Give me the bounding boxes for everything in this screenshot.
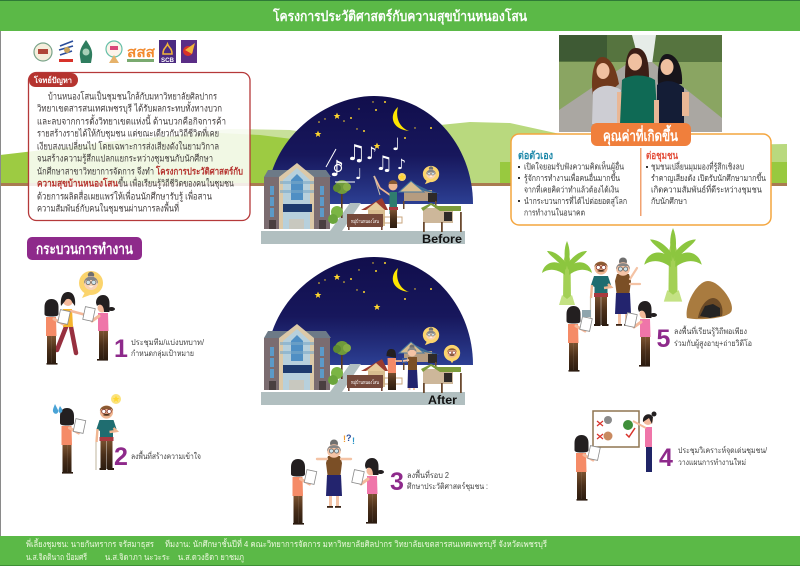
step 1 text: ประชุมทีม/แบ่งบทบาท/ [131, 338, 205, 347]
value for self: การทำงานในอนาคต [524, 208, 585, 218]
partner logos: SCB [161, 58, 175, 64]
bubble: star sound [398, 173, 406, 181]
page border [0, 0, 1, 566]
footer credits: พี่เลี้ยงชุมชน: นายกันทรากร จรัสมาธุสร [26, 538, 154, 550]
footer bar [0, 536, 800, 566]
step 1 text: กำหนดกลุ่มเป้าหมาย [131, 349, 194, 358]
value for community: กับนักศึกษา [651, 196, 687, 206]
number 1: 1 [114, 335, 128, 363]
value for community: ต่อชุมชน [646, 150, 679, 163]
heading: work process [27, 237, 142, 260]
scene: before: หมู่บ้านหนองโสน [351, 218, 379, 225]
value for community [646, 150, 766, 206]
green hill landscape [1, 122, 787, 186]
footer credits [26, 538, 547, 563]
footer credits: น.ส.จิดาภา นะวะระ [105, 552, 170, 562]
number 3: 3 [390, 468, 404, 496]
man conducting [374, 176, 398, 228]
scene: before [261, 96, 473, 246]
music notes [326, 135, 406, 183]
step 5 [542, 228, 752, 372]
step 2 text: ลงพื้นที่สร้างความเข้าใจ [131, 450, 201, 461]
tag: problem heading [29, 73, 78, 87]
problem text: โครงการประวัติศาสตร์กับ [155, 166, 243, 178]
illustration: studying history: ! [352, 436, 355, 446]
problem text: จนสร้างความรู้สึกแปลกแยกระหว่างชุมชนกับนักศึกษา [37, 154, 213, 164]
illustration: analysis board [574, 411, 656, 501]
panel: resulting value [511, 123, 771, 225]
student and elder talking [386, 344, 418, 390]
number 4: 4 [659, 444, 673, 472]
partner logos [34, 40, 197, 64]
header bar [0, 0, 800, 31]
heading: work process: กระบวนการทำงาน [36, 241, 134, 258]
person left [592, 57, 622, 124]
step 4 text: วางแผนการทำงานใหม่ [678, 458, 746, 467]
step 5 text: ลงพื้นที่เรียนรู้วิถีพอเพียง [674, 325, 747, 337]
step 3 [291, 433, 488, 525]
problem text: นักศึกษาสาขาวิทยาการจัดการ จึงทำ [37, 166, 154, 178]
footer credits: น.ส.จิตตินาถ ป้อมศรี [26, 552, 87, 562]
problem text: และลบจากการตั้งวิทยาเขตแห่งนี้ ด้านบวกคือกิจการค้า [37, 114, 226, 128]
step 4 [574, 411, 768, 501]
title: โครงการประวัติศาสตร์กับความสุขบ้านหนองโสน [272, 7, 527, 25]
value heading [591, 123, 691, 146]
tag: problem heading: โจทย์ปัญหา [33, 75, 72, 86]
problem text: วิทยาเขตสารสนเทศเพชรบุรี ได้รับผลกระทบทั้งทางบวก [36, 102, 222, 114]
illustration: learning sufficiency [542, 228, 732, 372]
value for community: เกิดความสัมพันธ์ที่ดีระหว่างชุมชน [651, 184, 762, 196]
label: after: After [428, 393, 457, 407]
illustration: studying history [291, 433, 384, 525]
number 2: 2 [114, 443, 128, 471]
step 4 text: ประชุมวิเคราะห์จุดเด่นชุมชน/ [678, 445, 768, 455]
step 4 text [678, 445, 768, 467]
value for self: ต่อตัวเอง [518, 150, 553, 162]
step 3 text: ลงพื้นที่รอบ 2 [407, 469, 449, 480]
partner logos: สสส [127, 44, 155, 60]
problem text: บ้านหนองโสนเป็นชุมชนใกล้กับมหาวิทยาลัยศิลปากร [48, 90, 217, 102]
problem text: ความสัมพันธ์กับคนในชุมชนผ่านการลงพื้นที่ [37, 202, 179, 214]
illustration: studying history: ! [343, 434, 346, 444]
label: before: Before [422, 232, 462, 246]
music notes: ♪ [397, 157, 406, 173]
problem text: ความสุขบ้านหนองโสน [37, 178, 118, 190]
scene: after: หมู่บ้านหนองโสน [351, 379, 379, 386]
value for self: นำกระบวนการที่ได้ไปต่อยอดสู่โลก [524, 195, 627, 207]
team photo [559, 35, 722, 132]
music notes: ♩ [392, 135, 400, 155]
person middle [620, 48, 659, 124]
problem text: รายสร้างรายได้ให้กับชุมชน แต่ขณะเดียวกันวิถีชีวิตที่เคย [37, 126, 219, 140]
value for self: เปิดใจยอมรับฟังความคิดเห็นผู้อื่น [524, 160, 624, 172]
problem text: เงียบสงบเปลี่ยนไป โดยเฉพาะการส่งเสียงดังในยามวิกาล [37, 140, 219, 152]
value for community: รำคาญเสียงดัง เปิดรับนักศึกษามากขึ้น [651, 172, 766, 183]
step 3 text: ศึกษาประวัติศาสตร์ชุมชน : [407, 481, 488, 491]
bubble: elder man [444, 345, 460, 363]
footer credits: ทีมงาน: นักศึกษาชั้นปีที่ 4 คณะวิทยาการจัดการ มหาวิทยาลัยศิลปากร วิทยาลัยเขตสารสนเทศเพชรบุรี จังหวัดเพชรบุรี [165, 538, 547, 550]
step 2 [53, 394, 201, 474]
value for self: รู้จักการทำงานเพื่อคนอื่นมากขึ้น [524, 172, 620, 184]
value for community: ชุมชนเปลี่ยนมุมมองที่รู้สึกเชิงลบ [651, 160, 744, 172]
illustration: studying history: ? [346, 433, 352, 443]
step 3 text [407, 469, 488, 491]
step 5 text: ร่วมกับผู้สูงอายุ+ถ่ายวิดีโอ [674, 338, 752, 349]
bubble: elder [423, 166, 439, 184]
step 5 text [674, 325, 752, 349]
value for self: จากที่เคยคิดว่าทำแล้วต้องได้เงิน [524, 184, 619, 194]
footer credits: น.ส.ดวงธิดา ยาชมภู [178, 552, 244, 563]
scene: after [261, 257, 473, 407]
music notes: ♪ [366, 144, 377, 164]
value heading: คุณค่าที่เกิดขึ้น [603, 124, 679, 146]
person right [657, 54, 689, 124]
problem text: ขึ้น เพื่อเรียนรู้วิถีชีวิตของคนในชุมชน [118, 176, 234, 190]
step 1 [44, 271, 205, 365]
music notes: ♫ [375, 151, 393, 175]
number 5: 5 [656, 325, 670, 353]
panel: problem statement [28, 72, 250, 220]
illustration: team meeting [44, 271, 115, 365]
problem text: ด้วยการผลิตสื่อเผยแพร่ให้เพื่อนนักศึกษารับรู้ เพื่อสาน [37, 190, 212, 202]
bubble: elder [423, 327, 439, 345]
music notes: ♫ [346, 141, 366, 166]
value for self [518, 150, 627, 218]
music notes: ♪ [330, 157, 344, 182]
problem text [36, 90, 243, 214]
illustration: building understanding [53, 394, 121, 474]
music notes: ♩ [355, 165, 362, 183]
step 1 text [131, 338, 205, 358]
